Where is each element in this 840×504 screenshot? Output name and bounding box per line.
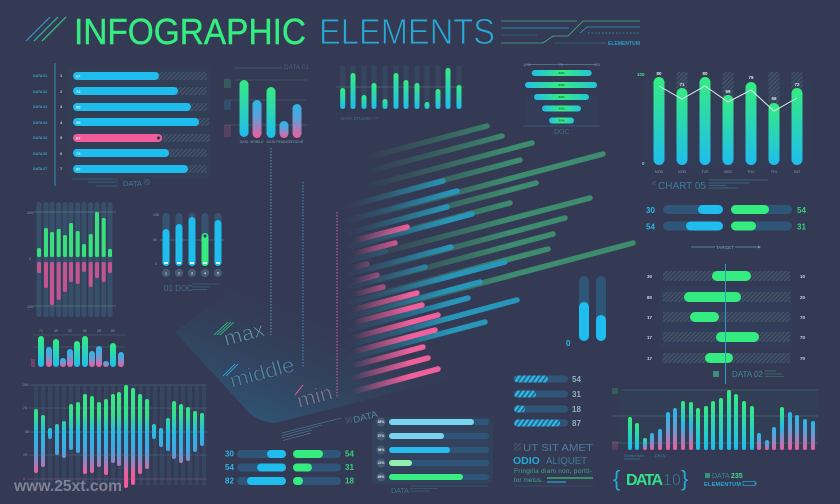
chart: funnel bars bbox=[523, 63, 600, 136]
chart: blue progress columns: 4 bbox=[204, 272, 206, 276]
panel: horizontal bar list: DATA 04 bbox=[33, 136, 47, 140]
text block: ut sit amet: UT SIT AMET bbox=[523, 442, 594, 454]
chart: twelve column green chart bbox=[336, 66, 464, 121]
chart: chart 05: WED bbox=[724, 170, 733, 174]
chart: bottom right columns: Elementum bbox=[624, 453, 645, 458]
chart: chart 05: 56 bbox=[771, 96, 777, 101]
chart: twin vertical bars bbox=[566, 276, 606, 348]
title word: elements: ELEMENTS bbox=[319, 11, 495, 52]
chart: diverging green bars: 80 bbox=[647, 295, 653, 300]
chart: chart 05: 100 bbox=[637, 72, 645, 77]
logo: data 10: DATA bbox=[626, 472, 663, 489]
chart: diverging green bars bbox=[647, 264, 806, 384]
chart: diverging green bars: 17 bbox=[647, 315, 653, 320]
panel: horizontal bar list: 74 bbox=[76, 89, 81, 94]
chart: chart 05: SAT bbox=[794, 170, 801, 174]
chart: diverging green bars: 30 bbox=[647, 274, 653, 279]
chart: large wave columns: 100 bbox=[22, 383, 28, 387]
chart: three row paired bars: 54 bbox=[345, 450, 354, 458]
chart: large wave columns: 75 bbox=[23, 406, 27, 410]
chart: percent bars panel bbox=[372, 417, 493, 495]
chart: positive negative columns bbox=[27, 202, 116, 317]
chart: five column chart: DATA 01 bbox=[284, 64, 309, 71]
chart: positive negative columns: 100 bbox=[27, 305, 33, 309]
chart: funnel bars: 40% bbox=[558, 106, 565, 110]
chart: bottom right columns: DATA bbox=[655, 453, 665, 458]
chart: three row paired bars bbox=[225, 450, 354, 486]
dashed level lines bbox=[271, 148, 337, 398]
chart: blue progress columns: 1 bbox=[165, 272, 167, 276]
chart: small mixed columns: 50 bbox=[111, 329, 115, 333]
chart: small mixed columns bbox=[31, 329, 125, 367]
chart: blue progress columns: 2 bbox=[178, 272, 180, 276]
header circuit lines: ELEMENTUM bbox=[608, 41, 640, 47]
chart: hatched progress bars: 31 bbox=[572, 390, 581, 399]
logo: data 10: { bbox=[613, 466, 620, 491]
panel: horizontal bar list: 95 bbox=[76, 120, 81, 125]
chart: twelve column green chart: DATA STUDIO bbox=[341, 116, 371, 121]
panel: horizontal bar list: DATA 04 bbox=[33, 121, 47, 125]
chart: chart 05: 71 bbox=[679, 82, 685, 87]
label: data 235: 235 bbox=[731, 473, 743, 480]
pink streaks bbox=[352, 227, 438, 392]
panel: horizontal bar list: 67 bbox=[76, 136, 81, 140]
panel: horizontal bar list: 89 bbox=[76, 104, 81, 110]
blue streaks bbox=[345, 181, 517, 359]
chart: chart 05: 80 bbox=[656, 71, 662, 76]
text block: ut sit amet bbox=[513, 442, 594, 486]
chart: three row paired bars: 31 bbox=[345, 463, 354, 472]
chart: large wave columns: 0 bbox=[23, 477, 25, 481]
chart: blue progress columns: 3 bbox=[191, 272, 193, 276]
chart: diverging green bars: 17 bbox=[647, 335, 653, 340]
chart: chart 05: 80 bbox=[702, 71, 708, 76]
chart: funnel bars: DOC bbox=[554, 129, 570, 136]
label: data 235: DATA bbox=[712, 473, 730, 480]
label: max: max bbox=[221, 318, 267, 351]
chart: slanted streak bars bbox=[345, 126, 633, 392]
chart: large wave columns: 50 bbox=[25, 430, 29, 434]
chart: blue progress columns: 0 bbox=[155, 262, 157, 266]
chart: five column chart: FOCUS bbox=[291, 140, 304, 144]
logo: data 10: 10 bbox=[663, 472, 681, 489]
chart: paired target bars: 31 bbox=[797, 222, 806, 232]
chart: paired target bars: 30 bbox=[646, 206, 655, 215]
chart: funnel bars: 60% bbox=[558, 95, 565, 99]
panel: horizontal bar list: 6 bbox=[60, 151, 63, 156]
chart: five column chart: MOBILE bbox=[250, 140, 264, 144]
text block: ut sit amet: Fringilla diam non, portti- bbox=[514, 468, 592, 475]
chart: funnel bars: 10% bbox=[523, 63, 531, 67]
logo: data 10: } bbox=[681, 466, 688, 491]
chart: chart 05: 79 bbox=[748, 75, 754, 80]
text block: ut sit amet: ODIO bbox=[513, 455, 540, 467]
chart: hatched progress bars bbox=[514, 375, 581, 428]
chart: percent bars panel: 96% bbox=[378, 448, 384, 452]
chart: paired target bars: 54 bbox=[646, 222, 655, 232]
panel: horizontal bar list: DATA 02 bbox=[33, 90, 47, 94]
chart: hatched progress bars: 18 bbox=[572, 405, 581, 414]
chart: positive negative columns: 100 bbox=[27, 211, 33, 215]
chart: diverging green bars: 17 bbox=[647, 356, 653, 361]
chart: small mixed columns: 25 bbox=[97, 329, 101, 333]
chart: positive negative columns: 0 bbox=[29, 257, 31, 261]
panel: horizontal bar list: 73 bbox=[76, 151, 81, 156]
panel: horizontal bar list: 4 bbox=[60, 120, 63, 125]
chart: small mixed columns: 66 bbox=[83, 329, 87, 333]
icon: title slashes bbox=[26, 17, 66, 41]
chart: chart 05: THU bbox=[747, 170, 755, 174]
chart: bottom right columns bbox=[612, 388, 818, 459]
chart: three row paired bars: 82 bbox=[225, 476, 234, 486]
panel: horizontal bar list: 5 bbox=[60, 135, 63, 140]
chart: blue progress columns: 5 bbox=[217, 272, 219, 276]
chart: chart 05: 72 bbox=[794, 82, 800, 87]
label: rotated data bbox=[282, 409, 379, 440]
chart: chart 05: MON bbox=[655, 170, 664, 174]
chart: chart 05: FRI bbox=[771, 170, 777, 174]
chart: chart 05: 0 bbox=[642, 161, 645, 166]
chart: chart 05: TUE bbox=[702, 170, 709, 174]
panel: central 3d plate bbox=[175, 180, 640, 423]
panel: horizontal bar list: 3 bbox=[60, 104, 63, 109]
watermark: www.25xt.com bbox=[13, 478, 122, 495]
chart: three row paired bars: 18 bbox=[345, 476, 354, 486]
label: data 235 bbox=[704, 473, 756, 488]
chart: three row paired bars: 54 bbox=[225, 463, 234, 472]
panel: horizontal bar list: DATA 06 bbox=[33, 152, 47, 156]
chart: funnel bars: 20% bbox=[558, 118, 565, 122]
chart: small mixed columns: 32 bbox=[68, 329, 72, 333]
panel: horizontal bar list: 7 bbox=[60, 166, 63, 171]
panel: horizontal bar list: DATA 03 bbox=[33, 105, 47, 109]
logo: data 10 bbox=[613, 466, 688, 491]
label: data 235: ELEMENTUM bbox=[704, 482, 741, 488]
chart: small mixed columns: 49 bbox=[54, 329, 58, 333]
green streaks bbox=[365, 126, 633, 314]
title word: infographic: INFOGRAPHIC bbox=[74, 11, 306, 52]
chart: diverging green bars: 70 bbox=[800, 356, 806, 361]
panel: horizontal bar list: 67 bbox=[76, 74, 81, 78]
panel: horizontal bar list: DATA bbox=[123, 179, 142, 188]
chart: chart 05: MON bbox=[678, 170, 687, 174]
chart: large wave columns bbox=[22, 383, 207, 488]
chart: diverging green bars: 10 bbox=[800, 274, 806, 279]
text block: ut sit amet: ALIQUET bbox=[546, 455, 588, 467]
label: min: min bbox=[294, 381, 335, 413]
chart: funnel bars: 100 bbox=[594, 63, 600, 67]
chart: funnel bars: 80% bbox=[558, 71, 565, 75]
chart: hatched progress bars: 54 bbox=[572, 375, 581, 384]
arrow: target bbox=[691, 245, 761, 250]
chart: paired target bars bbox=[646, 205, 806, 250]
chart: percent bars panel: 57% bbox=[378, 434, 384, 438]
chart: blue progress columns: 01 DOC bbox=[164, 284, 193, 293]
panel: horizontal bar list bbox=[33, 63, 210, 188]
chart: paired target bars: 54 bbox=[797, 206, 806, 215]
chart: five column chart: DATA bbox=[240, 140, 249, 144]
panel: horizontal bar list: 2 bbox=[60, 89, 63, 94]
chart: blue progress columns bbox=[153, 213, 224, 293]
chart: funnel bars: 70 bbox=[559, 63, 563, 67]
chart: twin vertical bars: 0 bbox=[566, 339, 571, 348]
chart: blue progress columns: 100 bbox=[153, 213, 159, 217]
chart: five column chart bbox=[224, 64, 309, 144]
chart: percent bars panel: 85% bbox=[378, 420, 384, 424]
chart: small mixed columns: 71 bbox=[39, 329, 43, 333]
header circuit lines bbox=[501, 21, 640, 47]
chart: diverging green bars: DATA 02 bbox=[732, 370, 763, 379]
panel: horizontal bar list: 87 bbox=[76, 166, 81, 172]
chart: five column chart: FINANCE bbox=[276, 140, 292, 144]
label: middle: middle bbox=[227, 354, 297, 393]
chart: blue progress columns: 50 bbox=[153, 238, 157, 242]
panel: horizontal bar list: DATA 07 bbox=[33, 167, 47, 171]
chart: large wave columns: 25 bbox=[23, 453, 27, 457]
panel: horizontal bar list: DATA 01 bbox=[33, 74, 47, 78]
chart: diverging green bars: 20 bbox=[800, 295, 806, 300]
chart: chart 05: CHART 05 bbox=[658, 181, 706, 192]
chart: chart 05 bbox=[637, 71, 810, 192]
label: rotated data: DATA bbox=[352, 409, 379, 425]
chart: diverging green bars: 70 bbox=[800, 315, 806, 320]
text block: ut sit amet: tor metus. bbox=[514, 477, 543, 484]
chart: hatched progress bars: 87 bbox=[572, 419, 581, 428]
chart: diverging green bars: 70 bbox=[800, 335, 806, 340]
title bbox=[26, 11, 495, 52]
arrow: target: TARGET bbox=[716, 245, 734, 250]
panel: horizontal bar list: 1 bbox=[60, 73, 63, 78]
chart: five column chart: DATA bbox=[267, 140, 276, 144]
chart: chart 05: 69 bbox=[725, 89, 731, 94]
chart: percent bars panel: 21% bbox=[378, 461, 384, 465]
chart: three row paired bars: 30 bbox=[225, 450, 234, 458]
chart: percent bars panel: DATA bbox=[391, 486, 409, 495]
chart: percent bars panel: 69% bbox=[378, 475, 384, 479]
chart: funnel bars: 90% bbox=[558, 83, 565, 87]
